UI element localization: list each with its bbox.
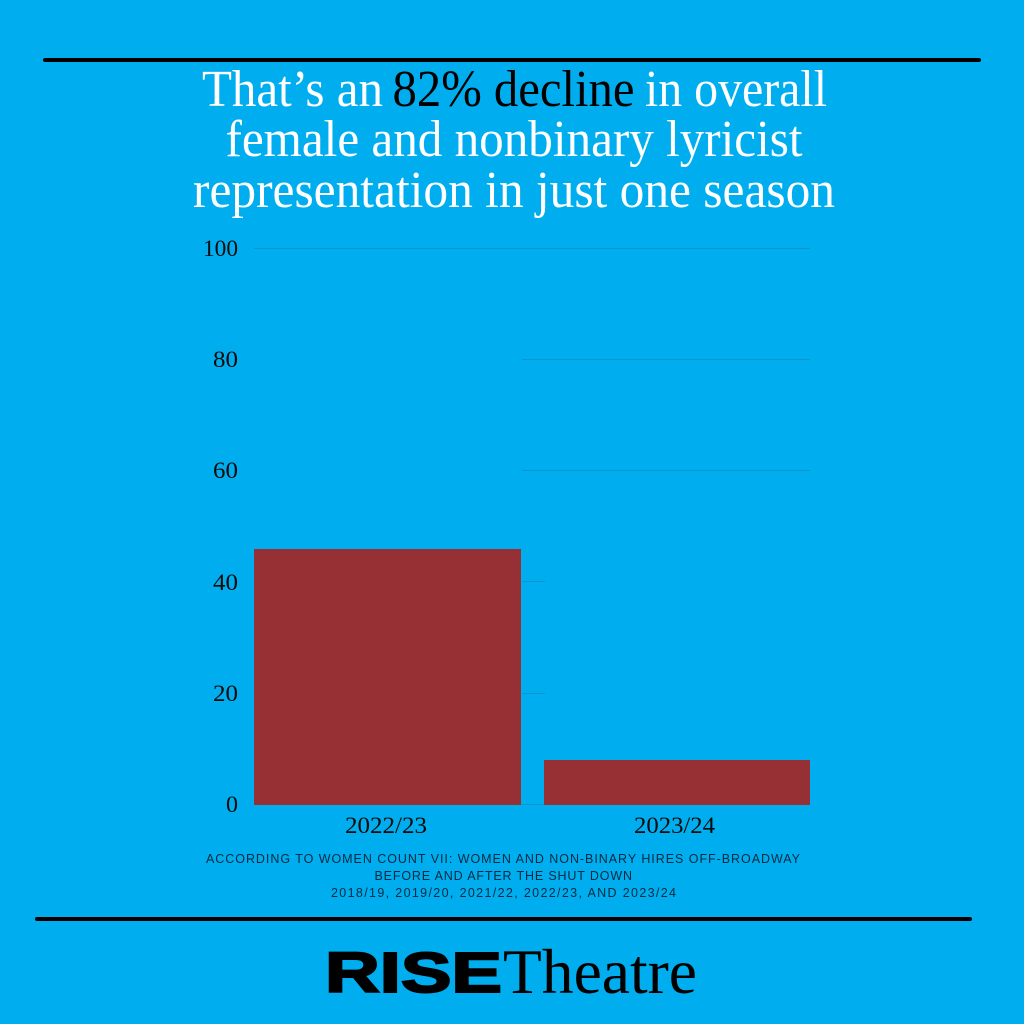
title: female and nonbinary lyricist — [226, 111, 803, 168]
y axis labels — [203, 236, 238, 817]
y axis labels: 0 — [226, 792, 238, 817]
logo: RISE Theatre: Theatre — [503, 936, 697, 1007]
x axis labels — [345, 813, 716, 838]
y axis labels: 60 — [213, 458, 238, 483]
logo: RISE Theatre: RISE — [325, 941, 502, 1005]
source note — [206, 852, 801, 900]
top rule — [43, 58, 981, 62]
title: in overall — [645, 61, 827, 118]
x axis labels: 2022/23 — [345, 813, 427, 838]
title: representation in just one season — [193, 162, 835, 219]
y axis labels: 40 — [213, 570, 238, 595]
y axis labels: 100 — [203, 236, 238, 261]
title: 82% decline — [392, 61, 634, 118]
y axis labels: 20 — [213, 681, 238, 706]
logo: RISE Theatre — [325, 936, 697, 1007]
bottom rule — [35, 917, 972, 921]
x axis labels: 2023/24 — [634, 813, 716, 838]
bar: 2023/24 — [544, 760, 810, 805]
title — [193, 61, 835, 219]
source note: ACCORDING TO WOMEN COUNT VII: WOMEN AND NON-BINARY HIRES OFF-BROADWAY — [206, 852, 801, 866]
source note: 2018/19, 2019/20, 2021/22, 2022/23, AND 2023/24 — [331, 886, 676, 900]
bar chart — [203, 236, 810, 838]
bar: 2022/23 — [254, 549, 521, 805]
title: That’s an — [202, 61, 383, 118]
y axis labels: 80 — [213, 347, 238, 372]
source note: BEFORE AND AFTER THE SHUT DOWN — [374, 869, 632, 883]
